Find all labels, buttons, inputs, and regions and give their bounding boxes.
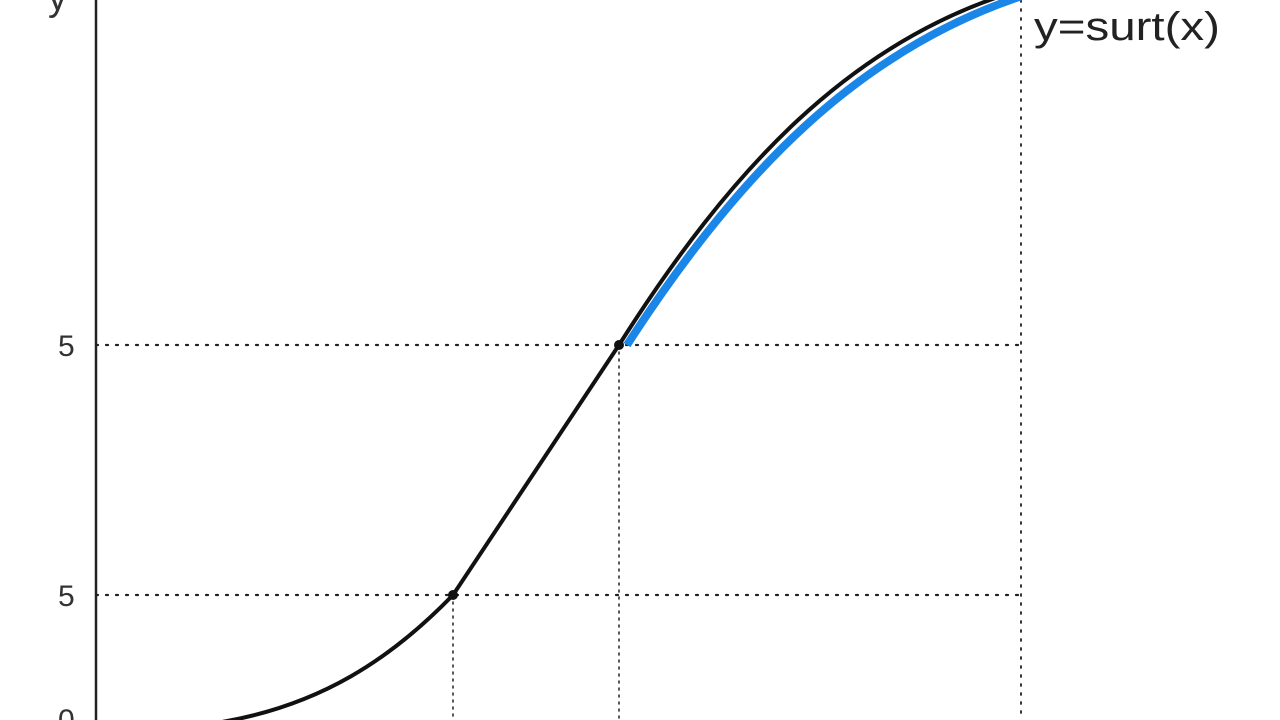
axis tick labels: 5 xyxy=(58,330,75,363)
function label: y=surt(x) xyxy=(1034,5,1220,49)
axis tick labels: 5 xyxy=(58,580,75,613)
points xyxy=(448,340,624,600)
axis tick labels xyxy=(58,330,75,720)
grid lines xyxy=(96,0,1021,720)
blue highlighted segment xyxy=(627,0,1022,345)
black curve xyxy=(222,0,1020,720)
